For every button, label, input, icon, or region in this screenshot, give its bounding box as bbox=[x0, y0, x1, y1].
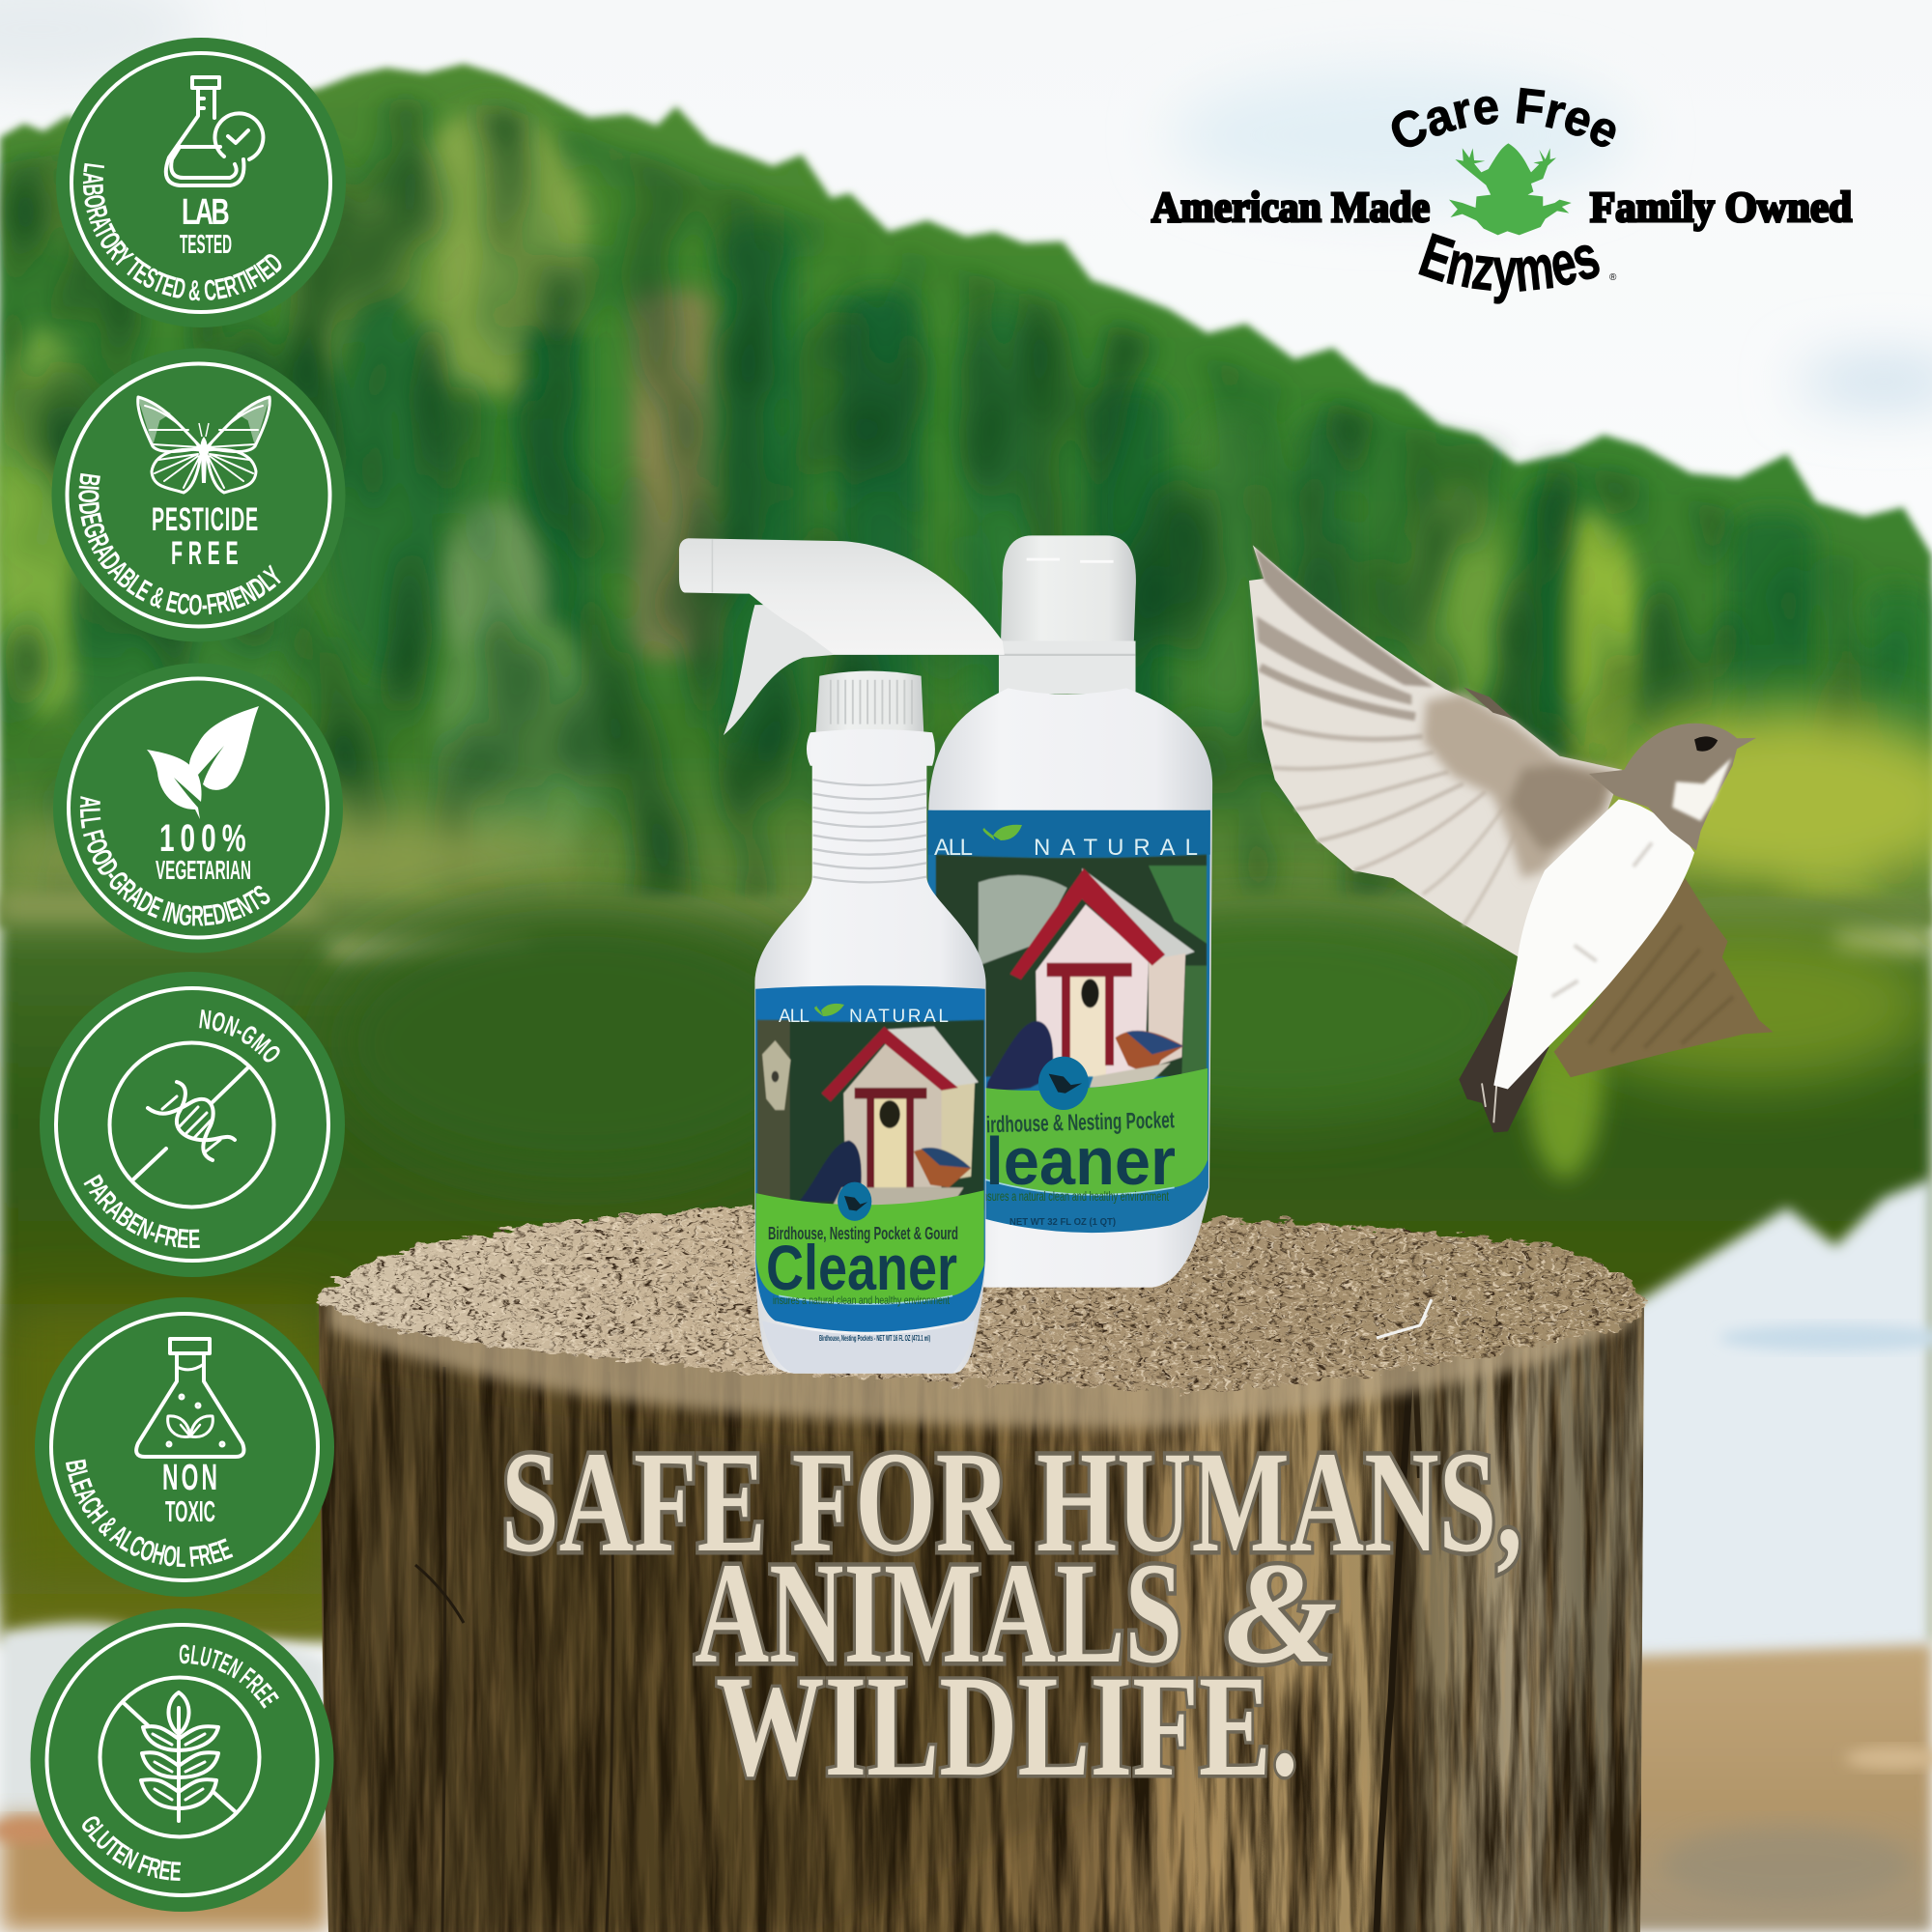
green panel bbox=[756, 1190, 984, 1304]
badge: non toxic: NON bbox=[162, 1457, 217, 1497]
icon: frog bbox=[1449, 143, 1572, 235]
label blue band bbox=[927, 810, 1210, 1233]
title: ANIMALS bbox=[695, 1533, 1182, 1693]
bird tail bbox=[1459, 973, 1549, 1132]
badge: lab tested: LABORATORY TESTED & CERTIFIED bbox=[83, 162, 282, 301]
badge: gluten free bbox=[31, 1608, 334, 1912]
badge: pesticide free: BIODEGRADABLE & ECO-FRIENDLY bbox=[78, 473, 281, 615]
label bbox=[755, 985, 985, 1332]
text: large bottle label: NET WT 32 FL OZ (1 QT) bbox=[1009, 1217, 1116, 1228]
text: large bottle label: Cleaner bbox=[939, 1123, 1176, 1199]
badge: non toxic: BLEACH & ALCOHOL FREE bbox=[66, 1459, 234, 1567]
tree stump bbox=[316, 1208, 1644, 1932]
text: spray bottle label bbox=[766, 1004, 958, 1343]
title: WILDLIFE. bbox=[716, 1646, 1298, 1806]
badge: 100% vegetarian: 100% bbox=[159, 817, 246, 860]
text: large bottle label: insures a natural clean and healthy environment bbox=[980, 1188, 1169, 1204]
badge: non-GMO, paraben-free bbox=[40, 972, 345, 1277]
birdhouse bbox=[886, 1027, 979, 1088]
badge: non toxic bbox=[35, 1297, 334, 1597]
text: large bottle label: ALL bbox=[934, 835, 973, 861]
body bbox=[928, 688, 1212, 1288]
badge: non-GMO, paraben-free: NON-GMO bbox=[199, 1009, 280, 1063]
title: & bbox=[1225, 1533, 1338, 1693]
spray bottle bbox=[679, 538, 1005, 1374]
icon: DNA with slash bbox=[133, 1067, 248, 1179]
badge: gluten free: GLUTEN FREE bbox=[180, 1644, 279, 1709]
badge: gluten free: GLUTEN FREE bbox=[82, 1816, 182, 1881]
badge: pesticide free: FREE bbox=[171, 534, 239, 571]
large bottle bbox=[927, 535, 1212, 1288]
bird body bbox=[1493, 800, 1694, 1090]
badge: 100% vegetarian: VEGETARIAN bbox=[156, 855, 251, 885]
logo: Care Free Enzymes: American Made bbox=[1151, 184, 1430, 231]
text: large bottle label: Birdhouse & Nesting Pocket bbox=[975, 1107, 1175, 1139]
logo: Care Free Enzymes: Enzymes bbox=[1418, 233, 1600, 304]
badge: non toxic: TOXIC bbox=[165, 1494, 215, 1528]
text: spray bottle label: insures a natural clean and healthy environment bbox=[773, 1293, 950, 1307]
text: large bottle label: NATURAL bbox=[1034, 835, 1198, 861]
badge: non-GMO, paraben-free: PARABEN-FREE bbox=[83, 1174, 200, 1248]
title bbox=[501, 1422, 1522, 1806]
badge: pesticide free bbox=[52, 348, 346, 641]
label photo bbox=[936, 855, 1207, 1076]
bird far wing bbox=[1554, 878, 1774, 1077]
bird bbox=[1249, 545, 1774, 1132]
bird neck and head bbox=[1589, 724, 1756, 851]
text: large bottle label bbox=[934, 825, 1198, 1228]
birdhouse bbox=[1082, 868, 1195, 963]
logo: Care Free Enzymes: Care Free bbox=[1391, 87, 1616, 147]
badge: 100% vegetarian bbox=[53, 663, 343, 952]
text: spray bottle label: ALL bbox=[779, 1007, 810, 1027]
logo: Care Free Enzymes: Family Owned bbox=[1590, 184, 1852, 231]
logo: Care Free Enzymes: ® bbox=[1609, 272, 1617, 283]
logo: Care Free Enzymes bbox=[1151, 87, 1853, 304]
badge: lab tested: TESTED bbox=[180, 229, 232, 259]
text: spray bottle label: NATURAL bbox=[849, 1007, 949, 1027]
text: spray bottle label: Birdhouse, Nesting Pockets - NET WT 16 FL OZ (473.1 ml) bbox=[819, 1334, 930, 1343]
stump top surface bbox=[316, 1208, 1644, 1428]
text: spray bottle label: Birdhouse, Nesting Pocket & Gourd bbox=[768, 1224, 958, 1243]
title: SAFE FOR HUMANS, bbox=[501, 1422, 1522, 1582]
badge: pesticide free: PESTICIDE bbox=[152, 500, 258, 537]
text: spray bottle label: Cleaner bbox=[766, 1232, 957, 1303]
icon: flask with check bbox=[166, 77, 263, 185]
spray head bbox=[679, 538, 1005, 655]
green panel bbox=[984, 1068, 1208, 1194]
collar bbox=[816, 671, 923, 732]
photo bbox=[757, 1020, 984, 1209]
icon: flask with leaf bbox=[136, 1339, 243, 1457]
spray trigger bbox=[724, 605, 835, 735]
badge: lab tested: LAB bbox=[182, 190, 230, 232]
icon: butterfly bbox=[138, 397, 270, 493]
icon: wheat with slash bbox=[124, 1692, 235, 1821]
bottom rim highlight bbox=[984, 1179, 1175, 1195]
cap bbox=[1001, 535, 1136, 646]
badge: 100% vegetarian: ALL FOOD-GRADE INGREDIENTS bbox=[79, 796, 270, 925]
badge: lab tested bbox=[56, 38, 346, 327]
bird near wing bbox=[1249, 545, 1622, 957]
icon: leaves bbox=[147, 706, 259, 819]
neck bbox=[754, 729, 986, 1374]
